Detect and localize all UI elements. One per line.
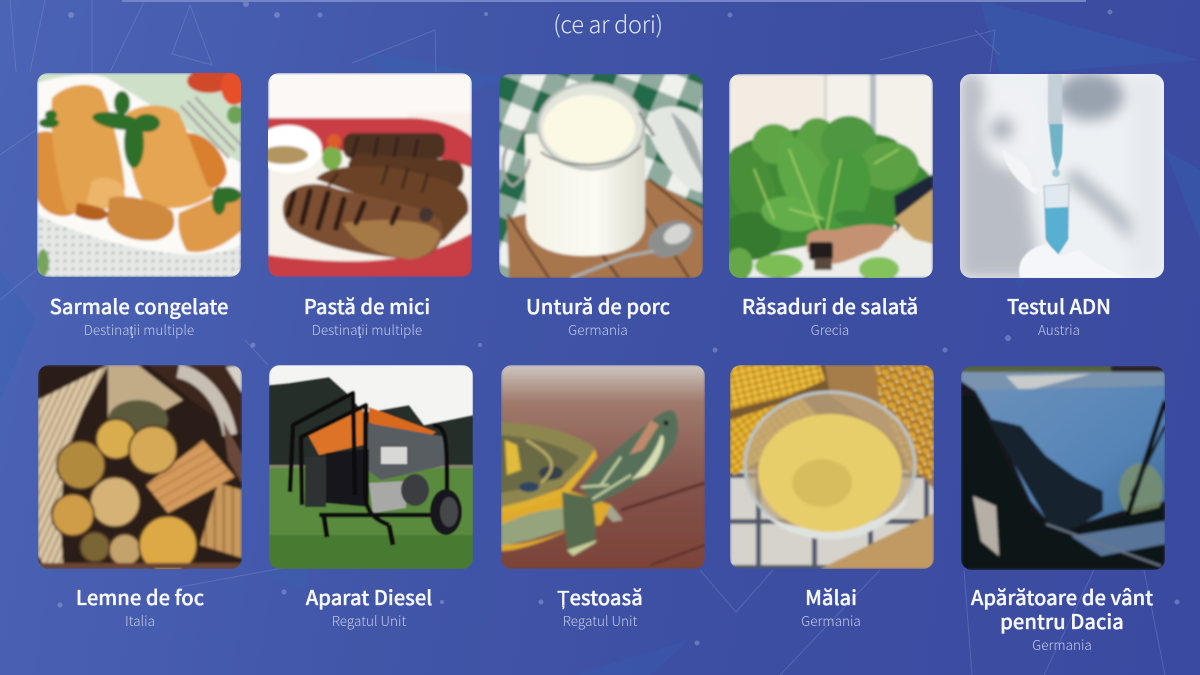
photo: testul ADN bbox=[960, 74, 1164, 278]
photo: testoasa bbox=[501, 365, 705, 569]
caption: pasta de mici bbox=[304, 291, 430, 339]
subtitle: (ce ar dori) bbox=[553, 6, 663, 40]
caption: testul ADN bbox=[1007, 291, 1111, 339]
caption: aparat diesel bbox=[306, 582, 432, 630]
photo: aparatoare de vant bbox=[961, 366, 1165, 570]
caption: rasaduri de salata: Grecia bbox=[811, 319, 849, 339]
caption: lemne de foc bbox=[76, 582, 204, 630]
photo: malai bbox=[730, 365, 934, 569]
photo: untura de porc bbox=[499, 74, 703, 278]
photo: aparat diesel bbox=[269, 365, 473, 569]
caption: untura de porc bbox=[526, 291, 670, 339]
caption: pasta de mici: Destinaţii multiple bbox=[312, 319, 422, 339]
caption: testoasa bbox=[557, 582, 643, 630]
caption: pasta de mici: Pastă de mici bbox=[304, 291, 430, 320]
caption: malai: Mălai bbox=[805, 582, 857, 611]
caption: lemne de foc: Lemne de foc bbox=[76, 582, 204, 611]
caption: sarmale: Sarmale congelate bbox=[50, 291, 228, 320]
caption: sarmale bbox=[50, 291, 228, 339]
caption: untura de porc: Untură de porc bbox=[526, 291, 670, 320]
caption: aparat diesel: Regatul Unit bbox=[332, 610, 406, 630]
caption: rasaduri de salata: Răsaduri de salată bbox=[742, 291, 918, 320]
caption: malai: Germania bbox=[801, 610, 861, 630]
caption: malai bbox=[801, 582, 861, 630]
caption: testoasa: Țestoasă bbox=[557, 582, 643, 611]
caption: aparatoare de vant: Apărătoare de vânt bbox=[971, 582, 1153, 611]
caption: rasaduri de salata bbox=[742, 291, 918, 339]
caption: sarmale: Destinaţii multiple bbox=[84, 319, 194, 339]
header rule bbox=[122, 0, 1086, 2]
caption: aparatoare de vant bbox=[970, 582, 1153, 654]
caption: aparatoare de vant: pentru Dacia bbox=[1000, 606, 1124, 635]
caption: lemne de foc: Italia bbox=[125, 610, 155, 630]
photo: pasta de mici bbox=[268, 73, 472, 277]
caption: testul ADN: Testul ADN bbox=[1007, 291, 1111, 320]
photo: rasaduri de salata bbox=[729, 74, 933, 278]
photo: sarmale bbox=[37, 73, 241, 277]
caption: untura de porc: Germania bbox=[568, 319, 628, 339]
caption: testoasa: Regatul Unit bbox=[563, 610, 637, 630]
caption: aparat diesel: Aparat Diesel bbox=[306, 582, 432, 611]
caption: testul ADN: Austria bbox=[1038, 319, 1080, 339]
caption: aparatoare de vant: Germania bbox=[1032, 634, 1092, 654]
photo: lemne de foc bbox=[38, 365, 242, 569]
